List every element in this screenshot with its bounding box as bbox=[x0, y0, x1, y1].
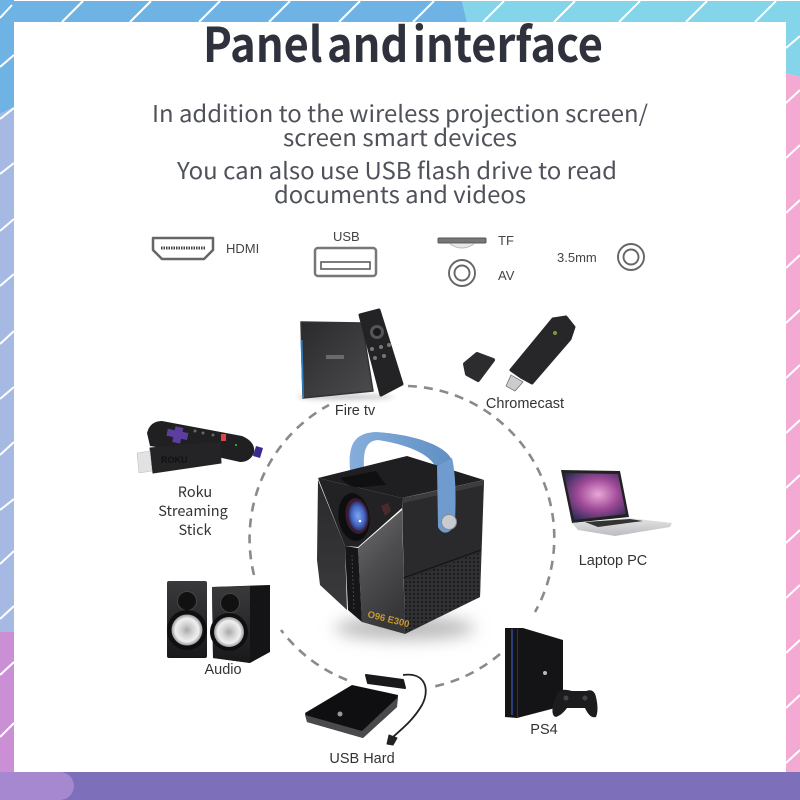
label: PS4: PS4 bbox=[530, 722, 558, 738]
icon: AV jack: AV bbox=[498, 268, 515, 283]
icon: 3.5mm jack bbox=[557, 244, 644, 270]
subtitle text: In addition to the wireless projection screen/ bbox=[152, 95, 648, 129]
icon: TF slot: TF bbox=[498, 233, 514, 248]
label: USB Hard: USB Hard bbox=[329, 751, 395, 767]
knob bbox=[442, 514, 456, 530]
icon: AV jack bbox=[449, 260, 515, 286]
label: Roku Streaming Stick: Roku bbox=[178, 481, 212, 502]
handle front strap bbox=[437, 458, 456, 533]
device: PS4 bbox=[505, 628, 598, 738]
device: Laptop PC bbox=[561, 470, 672, 569]
label: Roku Streaming Stick: Stick bbox=[178, 519, 212, 540]
device: USB Hard drive bbox=[305, 675, 426, 767]
bottom band bbox=[0, 772, 800, 800]
subtitle text: You can also use USB flash drive to read bbox=[176, 152, 617, 186]
model label: O96 E300 bbox=[366, 609, 410, 630]
label: Audio: Audio bbox=[204, 662, 242, 678]
icon: USB port: USB bbox=[333, 229, 360, 244]
label: Laptop PC: Laptop PC bbox=[579, 553, 647, 569]
icon: 3.5mm jack: 3.5mm bbox=[557, 250, 597, 265]
device: Chromecast bbox=[465, 317, 574, 412]
subtitle text: documents and videos bbox=[274, 176, 526, 210]
title: Panel and interface bbox=[203, 6, 603, 76]
top face bbox=[318, 456, 484, 498]
subtitle text: screen smart devices bbox=[283, 119, 517, 153]
device: Fire TV bbox=[297, 310, 402, 419]
subtitle text bbox=[152, 95, 648, 210]
lens bbox=[335, 491, 373, 543]
device: Roku Streaming Stick bbox=[137, 421, 263, 540]
icon: HDMI port: HDMI bbox=[226, 241, 259, 256]
device: Audio speakers bbox=[167, 581, 270, 678]
body front left face bbox=[317, 480, 347, 610]
label: Fire tv: Fire tv bbox=[335, 403, 376, 419]
projector bbox=[317, 432, 484, 640]
device: Roku Streaming Stick: ROKU bbox=[161, 455, 188, 465]
handle back bbox=[350, 432, 452, 470]
icon: TF slot bbox=[438, 233, 514, 248]
label: Roku Streaming Stick bbox=[158, 481, 228, 540]
icon: USB port bbox=[315, 229, 376, 276]
dashed connection ring bbox=[250, 386, 554, 687]
label: Chromecast: Chromecast bbox=[486, 396, 564, 412]
label: Roku Streaming Stick: Streaming bbox=[158, 500, 228, 521]
sensor bbox=[381, 503, 391, 516]
body right face bbox=[402, 482, 484, 634]
icon: HDMI port bbox=[153, 238, 259, 259]
